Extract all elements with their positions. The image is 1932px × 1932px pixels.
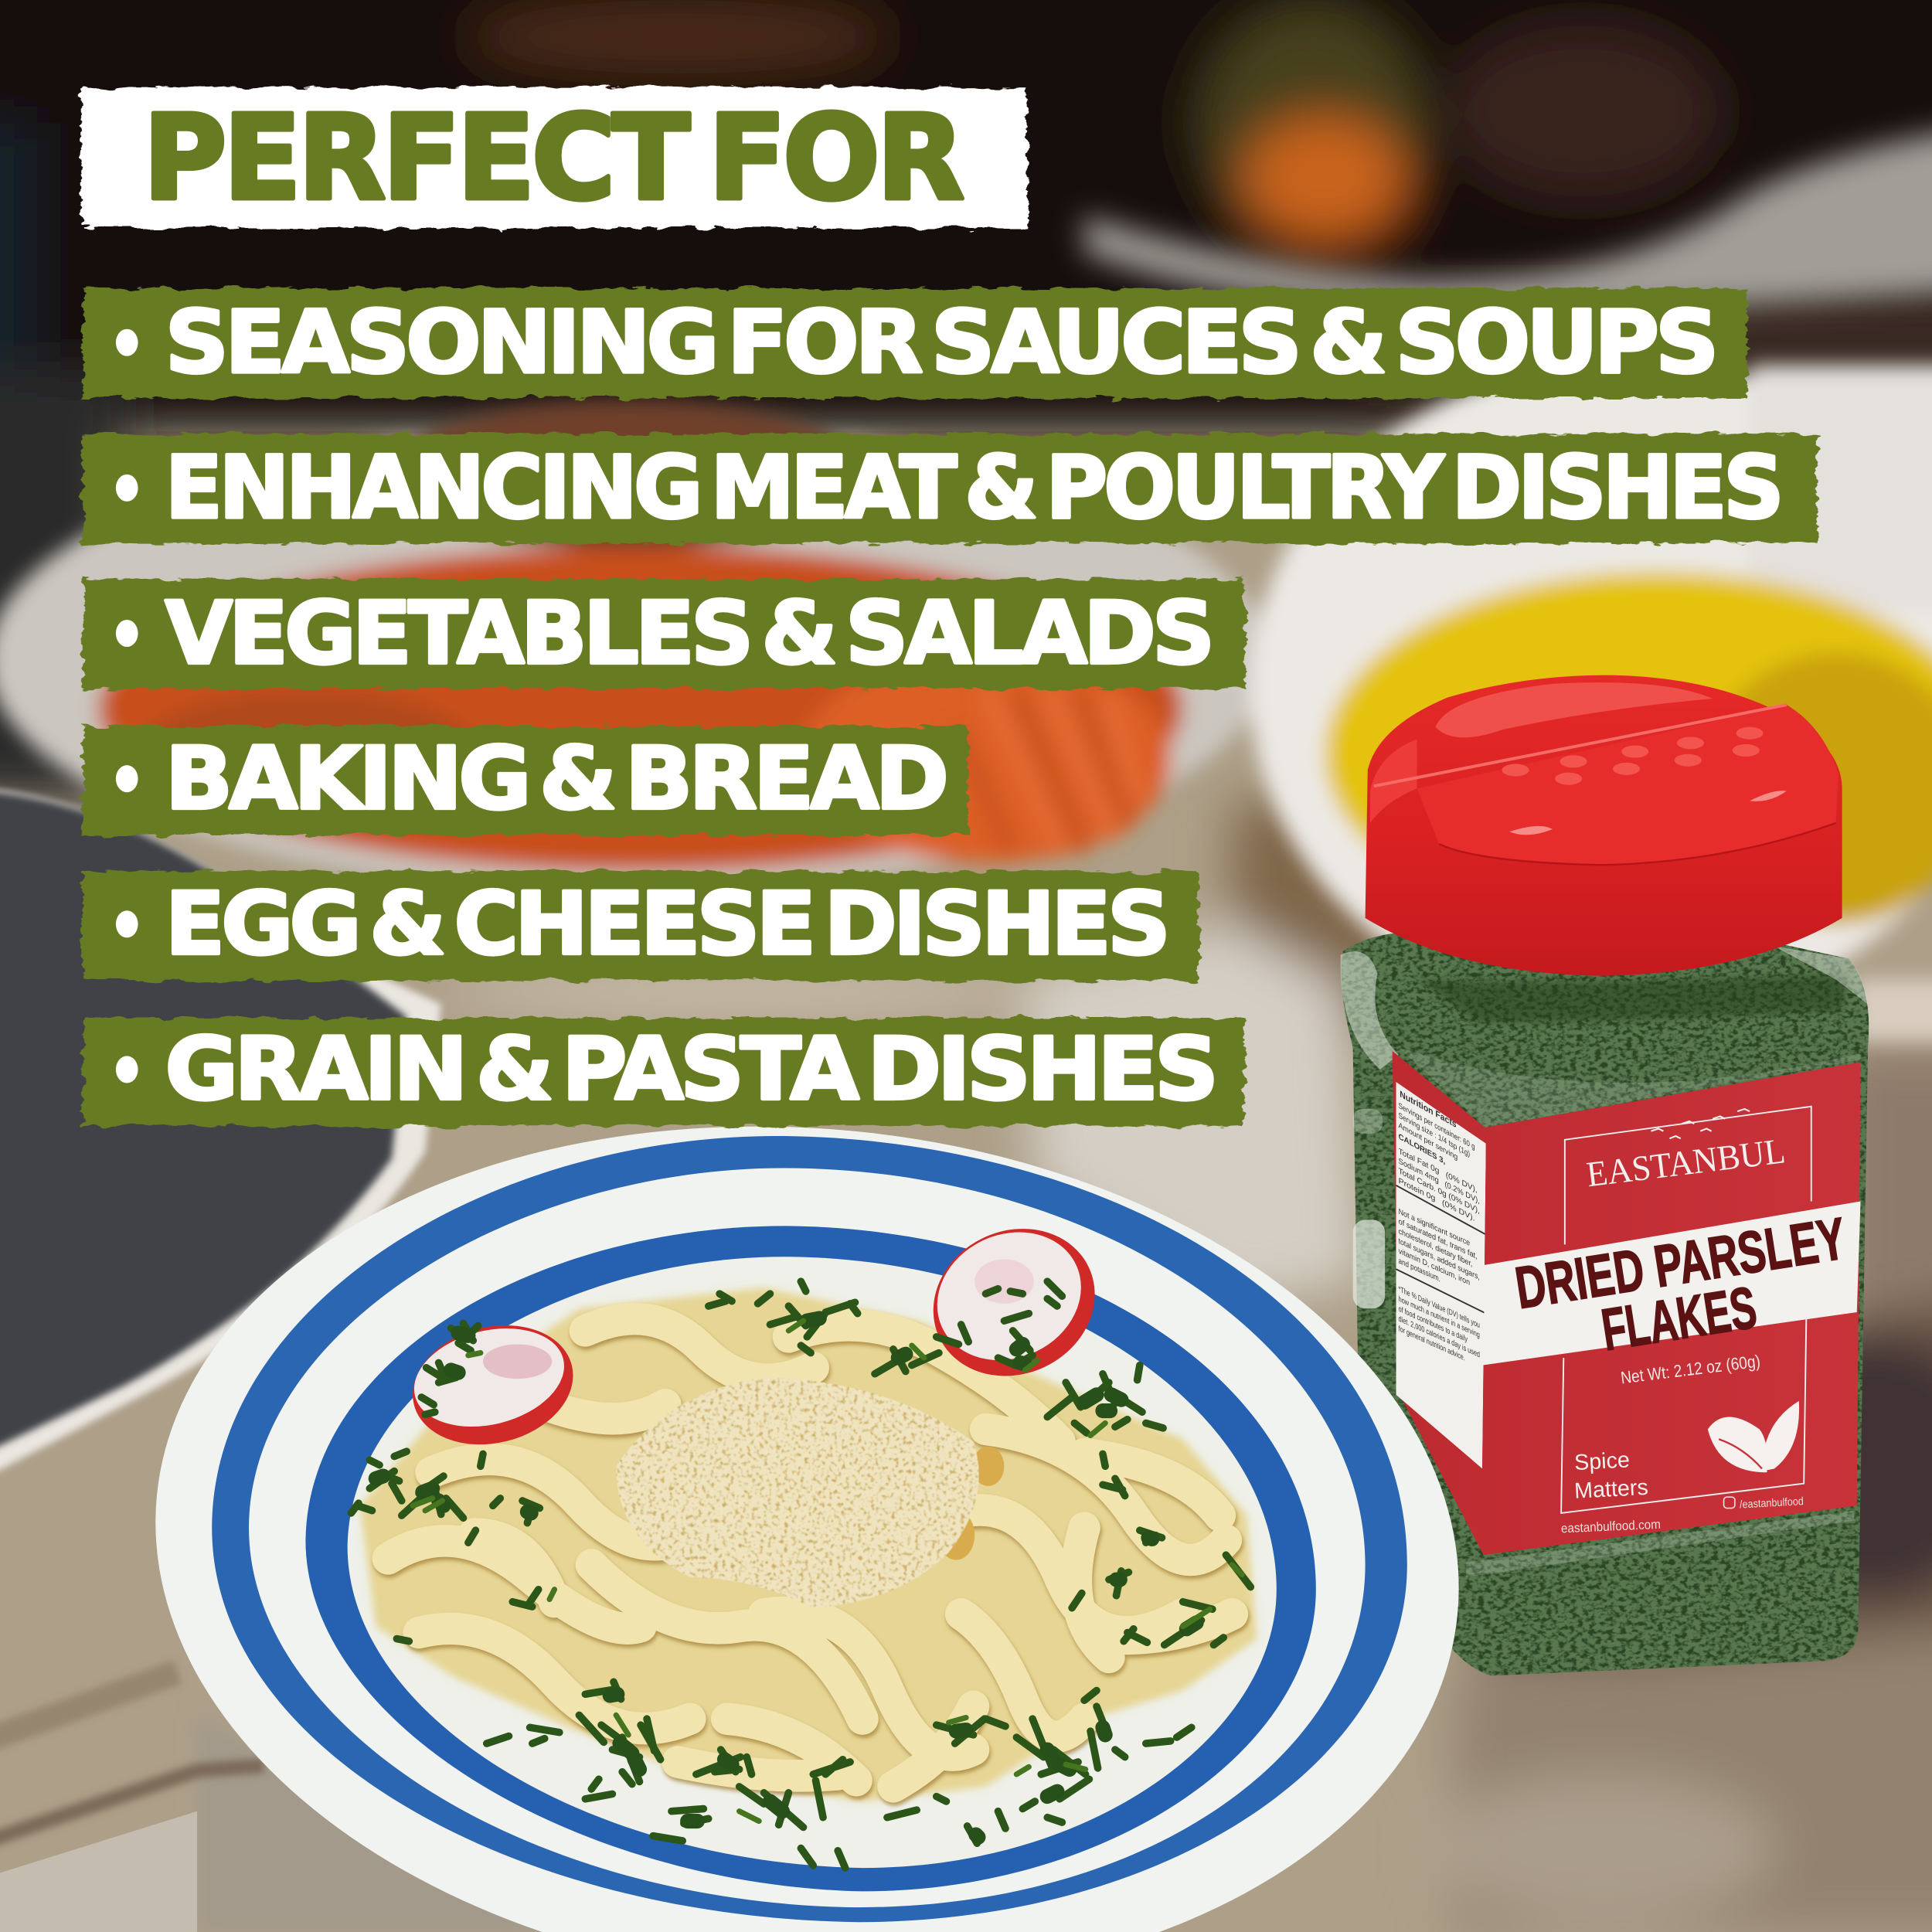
label inner frame	[1561, 1107, 1811, 1513]
tagline: Matters	[1573, 1475, 1649, 1504]
list item: meat and poultry: ENHANCING MEAT & POULTRY DISHES	[165, 438, 1781, 539]
list item: egg and cheese: EGG & CHEESE DISHES	[165, 874, 1167, 975]
nutrition facts side label: Total Fat 0g (0% DV),	[1399, 1147, 1478, 1195]
nutrition facts side label: *The % Daily Value (DV) tells you	[1399, 1284, 1480, 1330]
rear plate	[0, 425, 1269, 893]
pasta mound	[360, 1287, 1257, 1801]
nutrition facts side label: of saturated fat, trans fat,	[1399, 1217, 1478, 1261]
nutrition facts side label: Serving size : 1/4 tsp (1g)	[1399, 1111, 1470, 1159]
nutrition facts side label: Total Carb. 0g (0% DV),	[1399, 1166, 1480, 1216]
foreground plate of fettuccine	[155, 1127, 1459, 1932]
birds	[1651, 1109, 1750, 1138]
jar body with parsley	[1342, 932, 1869, 1675]
nutrition facts side label: vitamin D, calcium, iron	[1399, 1247, 1470, 1287]
list item: vegetables and salads: VEGETABLES & SALADS	[165, 583, 1211, 684]
nutrition facts side label: CALORIES 3,	[1399, 1132, 1445, 1166]
nutrition facts side label: Servings per container: 60 g	[1399, 1101, 1475, 1152]
product jar	[1341, 675, 1869, 1675]
cloth weave and stripes	[0, 1713, 554, 1932]
radish slice right	[909, 1202, 1119, 1402]
nutrition facts side label: how much a nutrient in a serving	[1399, 1294, 1480, 1340]
parsley garnish	[351, 1281, 1250, 1868]
heading: perfect for: PERFECT FOR	[143, 90, 963, 226]
radish slice left	[400, 1309, 586, 1461]
white band	[1482, 1202, 1861, 1366]
website: eastanbulfood.com	[1560, 1517, 1661, 1536]
brand name: EASTANBUL	[1584, 1131, 1787, 1194]
nutrition facts side label: Not a significant source	[1399, 1207, 1470, 1248]
nutrition facts side label: for general nutrition advice.	[1399, 1324, 1465, 1363]
nutrition facts side label: Sodium 4mg (0.2% DV),	[1399, 1157, 1480, 1206]
nutrition facts side label: cholesterol, dietary fiber,	[1399, 1226, 1472, 1269]
net weight: Net Wt: 2.12 oz (60g)	[1620, 1351, 1761, 1387]
tagline	[1573, 1447, 1649, 1504]
table far right and napkin	[1022, 924, 1362, 1306]
social handle: /eastanbulfood	[1740, 1495, 1804, 1512]
lid top recess	[1435, 682, 1713, 737]
product name line 2: FLAKES	[1597, 1275, 1761, 1363]
jar dark parsley streak	[1417, 974, 1849, 1022]
nutrition facts side label: Nutrition Facts	[1400, 1089, 1457, 1130]
carrot streaks	[955, 690, 1140, 850]
list item: baking and bread: BAKING & BREAD	[165, 729, 945, 829]
shaker holes	[1502, 727, 1764, 785]
lid	[1366, 675, 1842, 976]
tagline: Spice	[1573, 1447, 1631, 1475]
top plate rim	[1084, 123, 1932, 318]
dark slate plate	[0, 788, 441, 1476]
red label	[1393, 1051, 1861, 1555]
list item: grain and pasta: GRAIN & PASTA DISHES	[165, 1019, 1215, 1120]
jar highlights	[1341, 946, 1868, 1577]
nutrition facts side label: diet. 2,000 calories a day is used	[1399, 1315, 1480, 1359]
plate	[155, 1127, 1459, 1932]
nutrition facts side label: Amount per serving	[1399, 1121, 1458, 1162]
lid flip section	[1417, 705, 1838, 865]
icon: leaves	[1708, 1401, 1799, 1472]
parmesan	[616, 1378, 979, 1608]
list item: sauces and soups: SEASONING FOR SAUCES & SOUPS	[165, 293, 1715, 393]
pasta loops	[732, 1447, 1004, 1560]
nutrition facts side label: of food contributes to a daily	[1399, 1304, 1468, 1345]
yellow bowl	[1250, 360, 1932, 1020]
nutrition facts side label: and potassium.	[1399, 1257, 1440, 1284]
nutrition facts side label	[1396, 1082, 1486, 1469]
nutrition facts side label: total sugars, added sugars,	[1399, 1236, 1480, 1282]
nutrition facts side label: Protein 0g (0% DV).	[1399, 1176, 1475, 1223]
